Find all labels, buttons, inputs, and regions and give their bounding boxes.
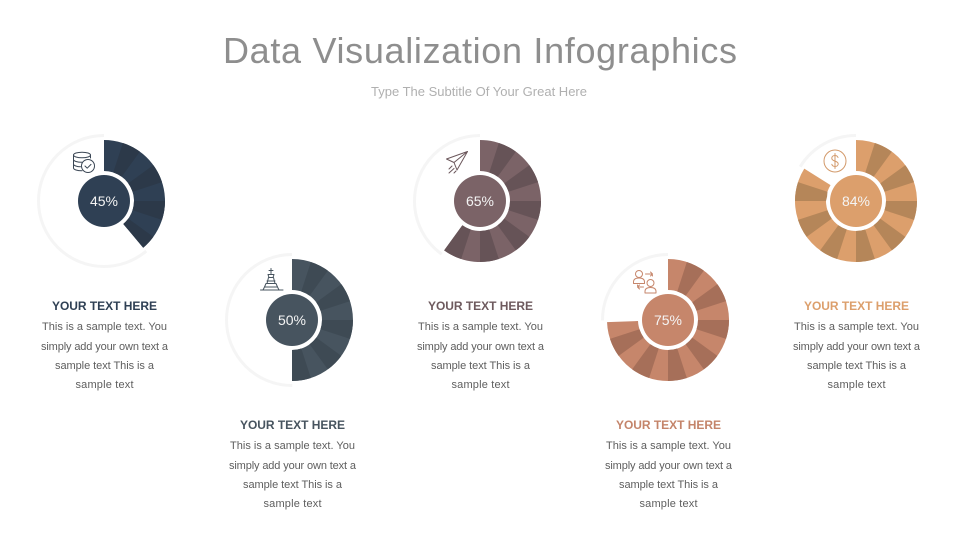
icon: dollar coin (824, 150, 846, 172)
title: Data Visualization Infographics (223, 30, 737, 71)
text block: This is a sample text. You (606, 440, 731, 452)
donut chart: 45%: 45% (90, 193, 118, 209)
heading: YOUR TEXT HERE (804, 299, 909, 313)
heading: YOUR TEXT HERE (616, 418, 721, 432)
text block: simply add your own text a (417, 341, 545, 353)
text block: simply add your own text a (41, 341, 169, 353)
icon: people exchange (634, 270, 656, 293)
text block: sample text This is a (55, 360, 155, 372)
text block: simply add your own text a (605, 460, 733, 472)
donut chart: 84% (790, 135, 922, 267)
heading: YOUR TEXT HERE (52, 299, 157, 313)
donut chart: 50%: 50% (278, 312, 306, 328)
icon: paper plane (446, 152, 468, 173)
heading: YOUR TEXT HERE (428, 299, 533, 313)
text block: sample text This is a (807, 360, 907, 372)
donut chart: 50% (226, 254, 358, 386)
text block: This is a sample text. You (42, 321, 167, 333)
text block: This is a sample text. You (794, 321, 919, 333)
text block: This is a sample text. You (230, 440, 355, 452)
text block (793, 321, 921, 391)
text block: sample text (264, 498, 322, 510)
heading: YOUR TEXT HERE (240, 418, 345, 432)
panel: 45% (38, 135, 170, 391)
text block (605, 440, 733, 510)
text block: simply add your own text a (793, 341, 921, 353)
text block (417, 321, 545, 391)
icon: chess king (260, 268, 283, 290)
text block: sample text (452, 379, 510, 391)
donut chart: 84%: 84% (842, 193, 870, 209)
panel: 50% (226, 254, 358, 510)
text block: This is a sample text. You (418, 321, 543, 333)
text block: sample text (828, 379, 886, 391)
panel: 65% (414, 135, 546, 391)
text block: sample text This is a (243, 479, 343, 491)
donut chart: 65% (414, 135, 546, 267)
icon: database check (74, 152, 94, 172)
text block: sample text (76, 379, 134, 391)
donut chart: 75% (602, 254, 734, 386)
donut chart: 65%: 65% (466, 193, 494, 209)
text block (229, 440, 357, 510)
donut chart: 75%: 75% (654, 312, 682, 328)
subtitle: Type The Subtitle Of Your Great Here (371, 84, 587, 99)
text block (41, 321, 169, 391)
text block: sample text (640, 498, 698, 510)
text block: sample text This is a (619, 479, 719, 491)
panel: 84% (790, 135, 922, 391)
donut chart: 45% (38, 135, 170, 267)
text block: sample text This is a (431, 360, 531, 372)
text block: simply add your own text a (229, 460, 357, 472)
panel: 75% (602, 254, 734, 510)
